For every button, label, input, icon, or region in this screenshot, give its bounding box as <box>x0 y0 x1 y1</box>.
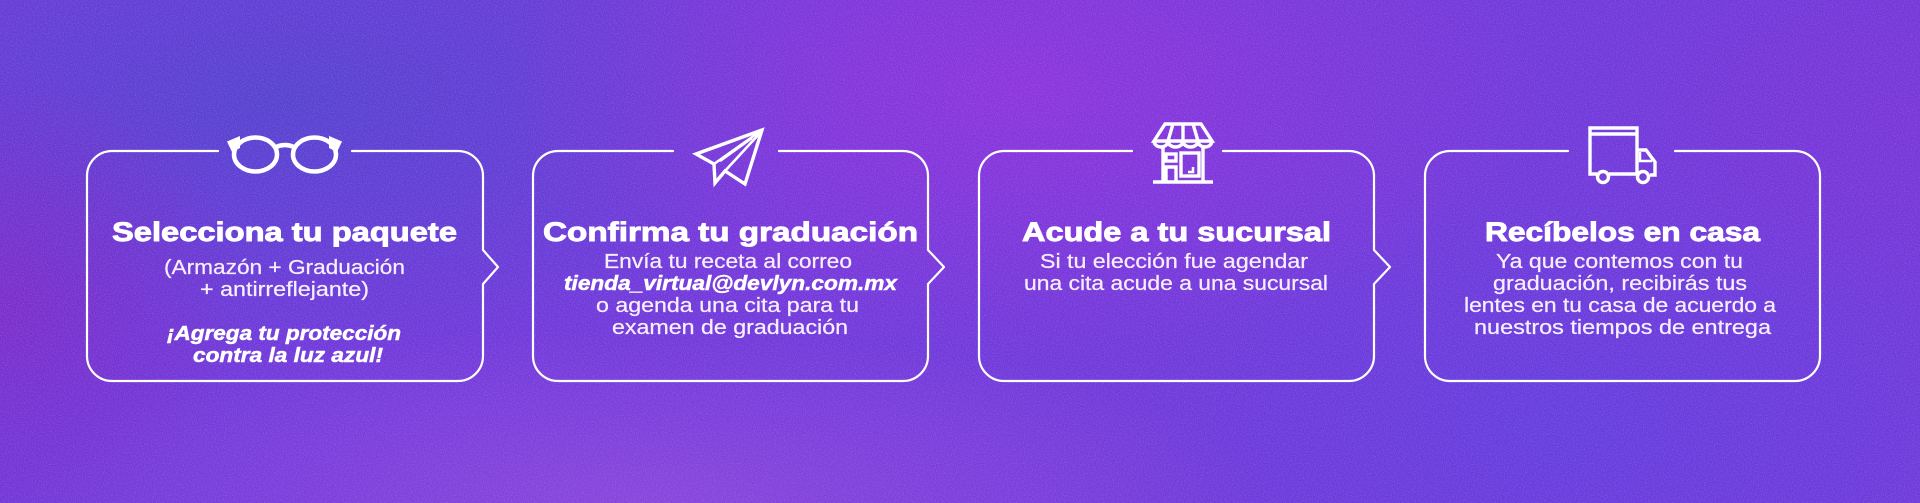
heading: Acude a tu sucursal <box>1022 217 1331 247</box>
panel outline <box>1425 151 1820 381</box>
description: una cita acude a una sucursal <box>1024 273 1328 295</box>
callout: blue light protection: contra la luz azul! <box>193 345 383 367</box>
description: Envía tu receta al correo <box>604 251 852 273</box>
description <box>164 257 405 301</box>
description: graduación, recibirás tus <box>1493 273 1747 295</box>
description: + antirreflejante) <box>200 279 369 301</box>
panel: selecciona tu paquete <box>87 136 498 381</box>
heading: Recíbelos en casa <box>1485 217 1761 247</box>
panel outline <box>979 151 1390 381</box>
icon: delivery truck <box>1590 128 1655 182</box>
panel outline <box>87 151 498 381</box>
icon: glasses <box>227 136 342 172</box>
panel: acude a tu sucursal <box>979 124 1390 381</box>
heading: Confirma tu graduación <box>543 217 918 247</box>
description <box>1464 251 1777 339</box>
heading: Selecciona tu paquete <box>112 217 457 247</box>
panel: recibelos en casa <box>1425 128 1820 381</box>
callout: blue light protection <box>167 323 401 367</box>
description <box>1024 251 1328 295</box>
description <box>564 251 898 339</box>
description: lentes en tu casa de acuerdo a <box>1464 295 1777 317</box>
description: (Armazón + Graduación <box>164 257 405 279</box>
description: nuestros tiempos de entrega <box>1474 317 1772 339</box>
callout: blue light protection: ¡Agrega tu protección <box>167 323 401 345</box>
description: tienda_virtual@devlyn.com.mx <box>564 273 898 295</box>
description: o agenda una cita para tu <box>596 295 859 317</box>
panel outline <box>533 151 944 381</box>
description: Ya que contemos con tu <box>1496 251 1743 273</box>
icon: paper plane <box>696 130 762 184</box>
panel: confirma tu graduacion <box>533 130 944 381</box>
icon: store <box>1153 124 1213 182</box>
description: examen de graduación <box>612 317 848 339</box>
description: Si tu elección fue agendar <box>1040 251 1308 273</box>
